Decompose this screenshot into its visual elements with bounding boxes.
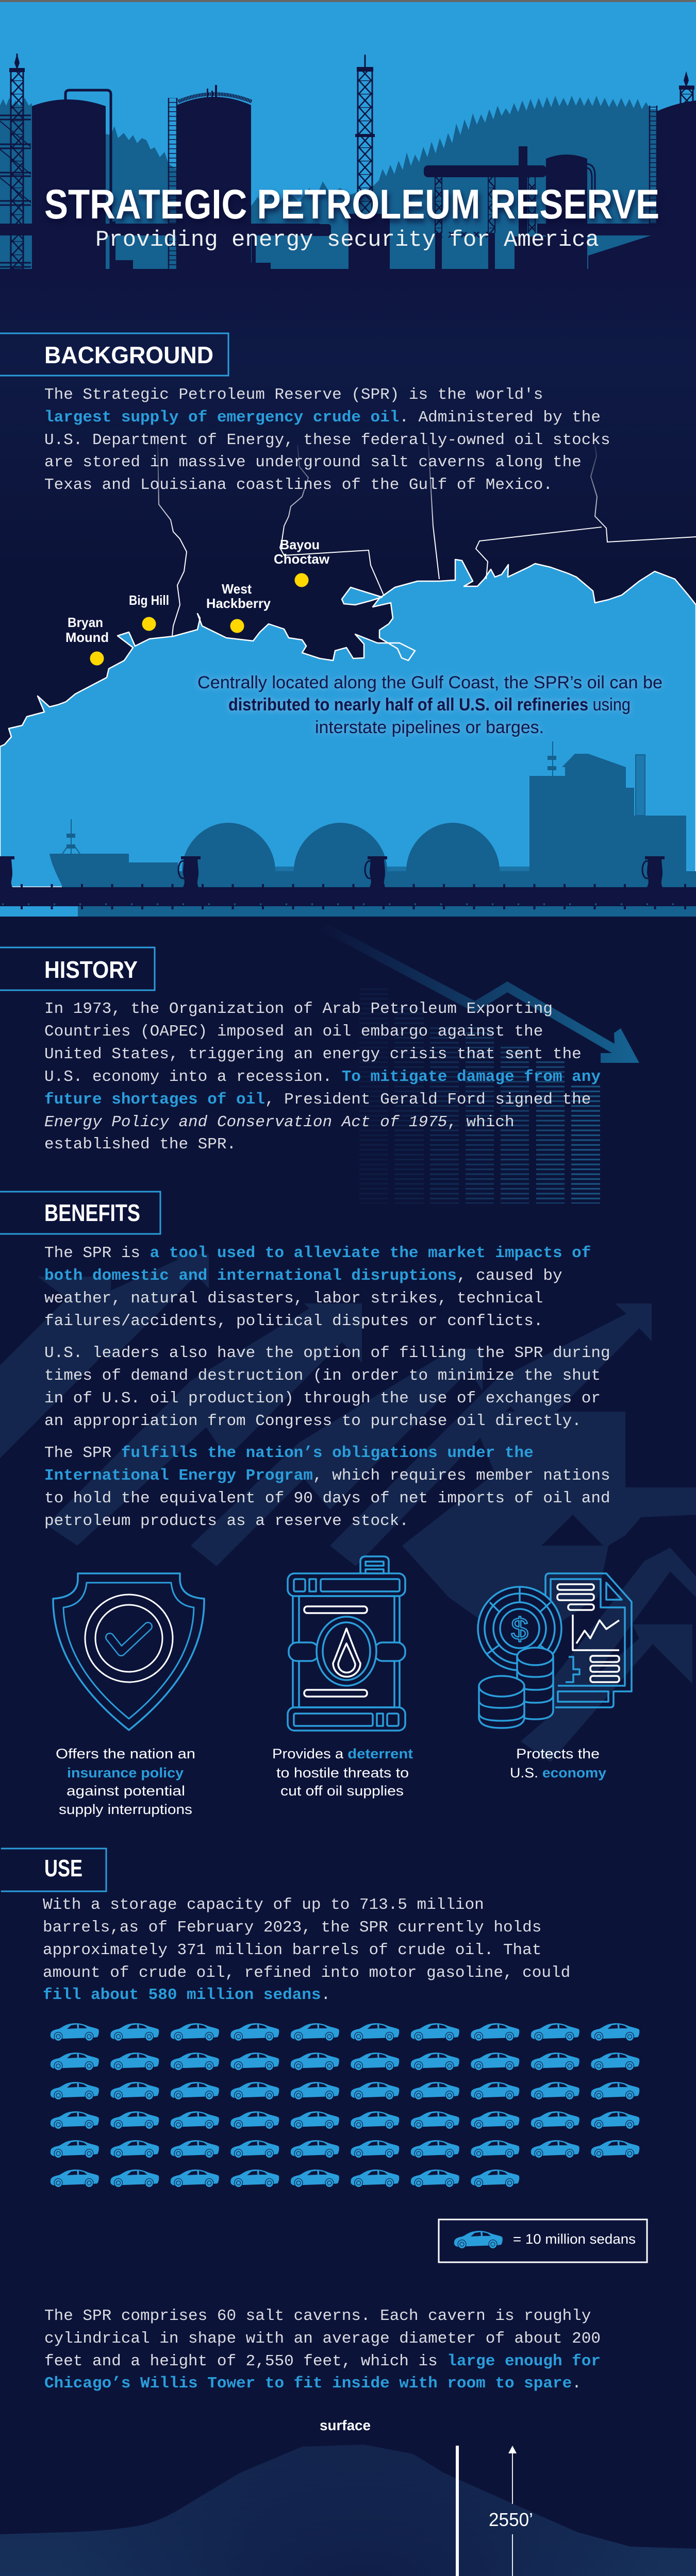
well pipe [456,2446,459,2576]
text: benefits paragraph two: times of demand destruction (in order to minimize the shut [44,1367,601,1385]
text: history paragraph: Energy Policy and Conservation Act of 1975, which [44,1113,515,1131]
map callout text: interstate pipelines or barges. [315,718,544,737]
ground [0,269,696,567]
text: benefits paragraph three: The SPR fulfills the nation’s obligations under the [44,1444,534,1462]
tank one with pipe [32,90,111,269]
text: background paragraph: Texas and Louisiana coastlines of the Gulf of Mexico. [44,476,553,494]
text: benefits paragraph three: petroleum products as a reserve stock. [44,1512,409,1530]
map callout text: Centrally located along the Gulf Coast, the SPR’s oil can be [197,673,662,692]
text: history paragraph: U.S. economy into a recession. To mitigate damage from any [44,1068,601,1086]
text: background paragraph: largest supply of emergency crude oil. Administered by the [44,409,601,427]
text: caverns paragraph: The SPR comprises 60 salt caverns. Each cavern is roughly [44,2307,591,2325]
text: use paragraph: approximately 371 million barrels of crude oil. That [43,1941,541,1959]
text: benefits paragraph three: International Energy Program, which requires member nations [44,1467,610,1485]
site marker: West Hackberry [206,581,271,633]
text: background paragraph [44,386,610,494]
site marker: Big Hill: Big Hill [129,592,169,608]
heading: benefits [0,1192,160,1234]
chart: falling price graphic [321,924,639,1204]
text: caverns paragraph: feet and a height of 2,550 feet, which is large enough for [44,2352,601,2370]
text: benefits paragraph two: U.S. leaders also have the option of filling the SPR during [44,1344,610,1362]
decorative rising arrows [0,1254,696,1762]
text: caverns paragraph: Chicago’s Willis Tower to fit inside with room to spare. [44,2375,582,2393]
icon: economy document and coins [478,1573,632,1728]
text: benefits paragraph one: weather, natural disasters, labor strikes, technical [44,1290,543,1308]
text: history paragraph: future shortages of oil, President Gerald Ford signed the [44,1091,591,1109]
heading: history: HISTORY [44,956,138,983]
salt dome background [0,2445,696,2576]
site marker: Bryan Mound: Bryan [68,615,103,630]
panel: background map [0,444,696,917]
legend: car equals 10 million sedans: = 10 million sedans [513,2231,636,2247]
dimension: 2550 feet: 2550’ [489,2509,533,2530]
text: caverns paragraph [44,2307,601,2393]
gulf of mexico water [0,560,696,887]
icon: shield with check [53,1573,204,1730]
text: use paragraph [43,1896,570,2004]
forest silhouette [0,96,657,269]
site marker: West Hackberry: West [222,581,252,597]
heading: use [1,1849,106,1891]
panel: benefits section [0,1192,632,1817]
text: history paragraph: Countries (OAPEC) imposed an oil embargo against the [44,1023,543,1041]
tank two with railing [169,85,252,269]
caption: economy [510,1746,606,1781]
right equipment [424,146,657,269]
pictogram: 58 sedans [51,2023,639,2188]
text: benefits paragraph three: to hold the equivalent of 90 days of net imports of oil and [44,1489,610,1507]
text: history paragraph: established the SPR. [44,1136,236,1154]
legend: car equals 10 million sedans [439,2219,647,2262]
text: benefits paragraph three [44,1444,610,1530]
icon: oil barrel [288,1556,405,1731]
caption: economy: Protects the [516,1746,600,1761]
panel: use section [1,1849,647,2393]
text: benefits paragraph two: in of U.S. oil production) through the use of exchanges or [44,1389,601,1408]
text: background paragraph: The Strategic Petroleum Reserve (SPR) is the world's [44,386,543,404]
text: benefits paragraph two: an appropriation from Congress to purchase oil directly. [44,1412,582,1430]
right tank [650,100,696,269]
caption: deterrent: cut off oil supplies [280,1783,404,1799]
dimension: 2550 feet [489,2446,533,2576]
text: use paragraph: With a storage capacity of up to 713.5 million [43,1896,484,1914]
panel: background section [0,333,610,494]
heading: history [0,947,155,990]
map callout text [197,673,662,737]
left stairs [0,115,31,267]
text: benefits paragraph one: both domestic and international disruptions, caused by [44,1267,562,1285]
text: benefits paragraph two [44,1344,610,1430]
caption: insurance policy [56,1746,195,1817]
caption: insurance policy: Offers the nation an [56,1746,195,1761]
pipeline valves [0,856,665,887]
caption: deterrent: Provides a deterrent [272,1746,413,1761]
heading: use: USE [44,1855,82,1882]
text: benefits paragraph one: failures/accidents, political disputes or conflicts. [44,1312,543,1330]
heading: background [0,333,228,376]
caption: insurance policy: against potential [67,1783,185,1799]
site marker: West Hackberry: Hackberry [206,596,271,611]
central block [349,214,390,269]
surface label: surface [320,2417,371,2433]
caption: insurance policy: insurance policy [67,1765,184,1781]
text: benefits paragraph one: The SPR is a tool used to alleviate the market impacts of [44,1244,591,1262]
map callout text: distributed to nearly half of all U.S. oil refineries using [228,695,631,715]
panel: history section [0,947,601,1154]
text: use paragraph: fill about 580 million sedans. [43,1986,330,2004]
site marker: Bayou Choctaw [274,537,330,587]
text: caverns paragraph: cylindrical in shape with an average diameter of about 200 [44,2330,601,2348]
horizontal pipes [0,224,320,235]
text: history paragraph [44,1000,601,1154]
icon: economy document and coins: $ [511,1612,528,1646]
text: history paragraph: United States, triggering an energy crisis that sent the [44,1045,582,1063]
lake [342,587,382,605]
subtitle: Providing energy security for America [95,227,599,253]
panel: cavern cross-section diagram [0,2417,696,2576]
caption: deterrent: to hostile threats to [276,1765,409,1781]
text: history paragraph: In 1973, the Organization of Arab Petroleum Exporting [44,1000,553,1018]
site marker: Bryan Mound [65,615,109,666]
heading: background: BACKGROUND [44,342,213,368]
text: use paragraph: amount of crude oil, refined into motor gasoline, could [43,1964,570,1982]
vertical columns [111,222,271,269]
text: benefits paragraph one [44,1244,591,1330]
dock band [0,886,696,917]
text: use paragraph: barrels,as of February 2023, the SPR currently holds [43,1919,541,1937]
site marker: Bayou Choctaw: Bayou [280,537,320,552]
site marker: Bryan Mound: Mound [65,630,109,645]
panel: header illustration [0,0,696,567]
caption: economy: U.S. economy [510,1765,606,1781]
caption: insurance policy: supply interruptions [59,1802,192,1817]
site marker: Bayou Choctaw: Choctaw [274,551,330,567]
heading: benefits: BENEFITS [44,1199,140,1226]
text: background paragraph: U.S. Department of Energy, these federally-owned oil stocks [44,431,610,449]
caption: deterrent [272,1746,413,1799]
text: background paragraph: are stored in massive underground salt caverns along the [44,453,582,471]
state borders [158,444,696,636]
refinery skyline [49,741,696,887]
refinery silhouettes [0,85,696,269]
site marker: Big Hill [129,592,169,631]
lattice towers [9,54,694,269]
